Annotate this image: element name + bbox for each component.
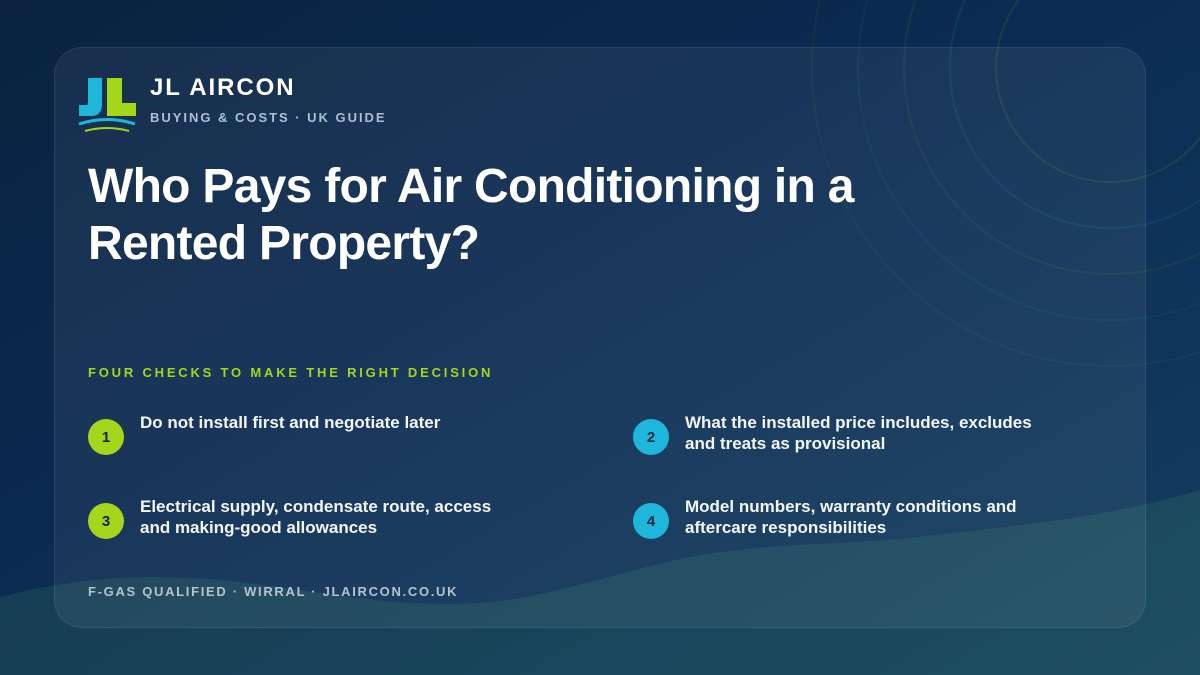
brand name: JL AIRCON xyxy=(150,74,296,101)
check 2 text: What the installed price includes, excludes xyxy=(685,413,1032,432)
number badge 3: 3 xyxy=(102,513,110,530)
check 3 text: and making-good allowances xyxy=(140,518,377,537)
title: Rented Property? xyxy=(88,217,479,270)
number badge 3 xyxy=(88,503,124,539)
check 4 text: aftercare responsibilities xyxy=(685,518,886,537)
panel: main card xyxy=(54,47,1146,628)
icon: JL logo xyxy=(78,78,136,132)
title: Who Pays for Air Conditioning in a xyxy=(88,160,854,213)
check 4 text: Model numbers, warranty conditions and xyxy=(685,497,1017,516)
number badge 4 xyxy=(633,503,669,539)
check 3 text: Electrical supply, condensate route, access xyxy=(140,497,491,516)
check 1 text: Do not install first and negotiate later xyxy=(140,413,440,432)
check 4 text xyxy=(685,497,1017,537)
number badge 2: 2 xyxy=(647,429,655,446)
section heading: FOUR CHECKS TO MAKE THE RIGHT DECISION xyxy=(88,365,493,380)
check 3 text xyxy=(140,497,491,537)
check 2 text: and treats as provisional xyxy=(685,434,885,453)
number badge 4: 4 xyxy=(647,513,655,530)
title xyxy=(88,160,855,270)
number badge 2 xyxy=(633,419,669,455)
number badge 1 xyxy=(88,419,124,455)
number badge 1: 1 xyxy=(102,429,110,446)
check 2 text xyxy=(685,413,1032,453)
footer line: F-GAS QUALIFIED · WIRRAL · JLAIRCON.CO.UK xyxy=(88,584,458,599)
brand subtitle: BUYING & COSTS · UK GUIDE xyxy=(150,110,387,125)
